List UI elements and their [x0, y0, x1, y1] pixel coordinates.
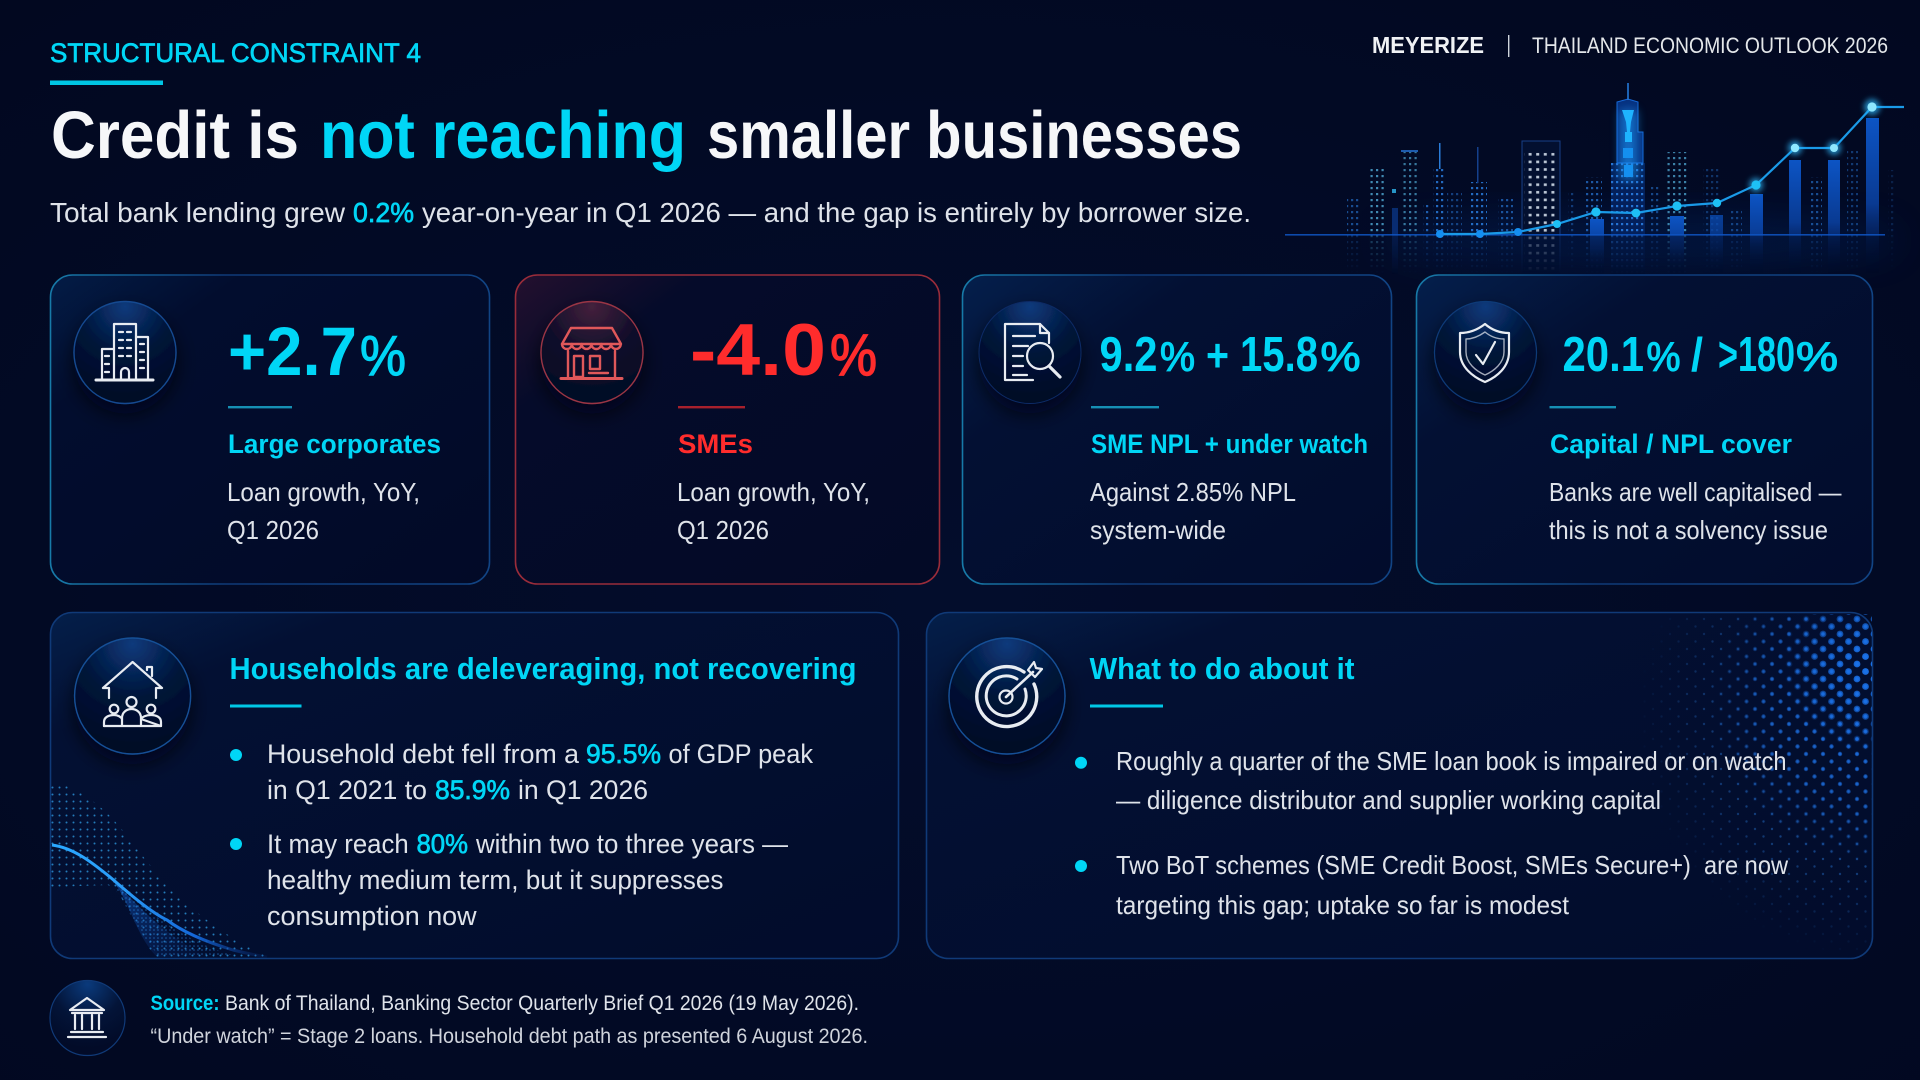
bullet: outlook: 80%: [416, 829, 468, 859]
icon: shield with check: [1434, 302, 1536, 404]
footer source: [50, 980, 868, 1056]
title: [51, 98, 1242, 173]
value: %: [1796, 334, 1838, 380]
value: /: [1691, 328, 1703, 381]
value: %: [1320, 334, 1360, 380]
description: Against 2.85% NPL: [1090, 477, 1296, 507]
bullet: debt: Household debt fell from a: [267, 739, 580, 769]
icon: bank: [50, 980, 125, 1056]
description: this is not a solvency issue: [1549, 515, 1828, 545]
bullet: outlook: within two to three years —: [475, 829, 788, 859]
label: Capital / NPL cover: [1550, 429, 1792, 459]
bullet: diligence: [1075, 746, 1786, 815]
source text: [150, 991, 868, 1048]
value: 15.8: [1240, 328, 1318, 382]
decorative wave: [50, 782, 270, 958]
subtitle: [50, 197, 1251, 228]
bullet: outlook: consumption now: [267, 901, 477, 931]
title: not reaching: [320, 98, 686, 173]
bullet: schemes: Two BoT schemes (SME Credit Boost, SMEs Secure+) are now: [1116, 850, 1788, 880]
bullet: debt: [230, 739, 813, 805]
icon: office buildings: [74, 302, 176, 404]
bullet: debt: 85.9%: [435, 775, 510, 805]
value: %: [1160, 334, 1195, 380]
bullet: schemes: [1075, 850, 1788, 920]
header brand: MEYERIZE: [1372, 32, 1484, 58]
eyebrow label: [50, 38, 421, 85]
description: Loan growth, YoY,: [677, 477, 870, 507]
panel: capital cover: [1416, 275, 1872, 584]
description: [677, 477, 870, 545]
value: -4.0: [690, 310, 826, 391]
value: [1100, 328, 1360, 382]
heading: Households are deleveraging, not recovering: [230, 652, 856, 686]
skyline and rising line chart: [1285, 83, 1904, 274]
description: Q1 2026: [227, 515, 319, 545]
value: +: [1206, 329, 1229, 381]
source text: “Under watch” = Stage 2 loans. Household debt path as presented 6 August 2026.: [150, 1024, 868, 1048]
description: Banks are well capitalised —: [1549, 477, 1842, 507]
value: [690, 310, 877, 391]
description: [227, 477, 420, 545]
icon: document with magnifier: [979, 302, 1081, 404]
description: system-wide: [1090, 515, 1226, 545]
description: Q1 2026: [677, 515, 769, 545]
title: smaller businesses: [707, 98, 1242, 173]
title: Credit is: [51, 98, 299, 173]
value: +2.7: [228, 313, 357, 390]
bullet: debt: of GDP peak: [668, 739, 813, 769]
bullet: debt: in Q1 2021 to: [267, 775, 427, 805]
bullet: diligence: — diligence distributor and supplier working capital: [1116, 785, 1661, 815]
bullet: outlook: [230, 829, 788, 931]
label: SME NPL + under watch: [1091, 429, 1368, 459]
subtitle: 0.2%: [353, 197, 414, 228]
bullet: debt: in Q1 2026: [518, 775, 648, 805]
label: Large corporates: [228, 429, 441, 459]
value: 20.1: [1562, 328, 1644, 382]
header brand: [1372, 32, 1888, 58]
bullet: diligence: Roughly a quarter of the SME loan book is impaired or on watch: [1116, 746, 1786, 776]
label: SMEs: [678, 429, 753, 459]
bullet: debt: 95.5%: [586, 739, 661, 769]
bullet: outlook: healthy medium term, but it suppresses: [267, 865, 724, 895]
value: >180: [1718, 328, 1795, 382]
value: %: [1646, 334, 1680, 380]
icon: house with family: [75, 638, 191, 754]
description: Loan growth, YoY,: [227, 477, 420, 507]
panel: SME NPL: [962, 275, 1392, 584]
value: %: [360, 324, 406, 388]
bullet: schemes: targeting this gap; uptake so far is modest: [1116, 890, 1570, 920]
description: [1090, 477, 1296, 545]
panel: SMEs: [516, 275, 940, 584]
subtitle: year-on-year in Q1 2026 — and the gap is entirely by borrower size.: [422, 197, 1251, 228]
source text: Bank of Thailand, Banking Sector Quarterly Brief Q1 2026 (19 May 2026).: [225, 991, 859, 1015]
panel: what to do: [926, 612, 1872, 958]
decorative halftone: [1640, 614, 1872, 958]
subtitle: Total bank lending grew: [50, 197, 346, 228]
icon: storefront: [541, 302, 643, 404]
source text: Source:: [150, 992, 220, 1015]
panel: large corporates: [50, 275, 490, 584]
description: [1549, 477, 1842, 545]
eyebrow label: STRUCTURAL CONSTRAINT 4: [50, 38, 421, 68]
bullet: outlook: It may reach: [267, 829, 409, 859]
icon: target with arrow: [949, 638, 1065, 754]
value: %: [830, 323, 877, 388]
heading: What to do about it: [1090, 652, 1354, 686]
value: 9.2: [1100, 328, 1158, 382]
value: [1562, 328, 1838, 382]
panel: households: [50, 612, 898, 958]
